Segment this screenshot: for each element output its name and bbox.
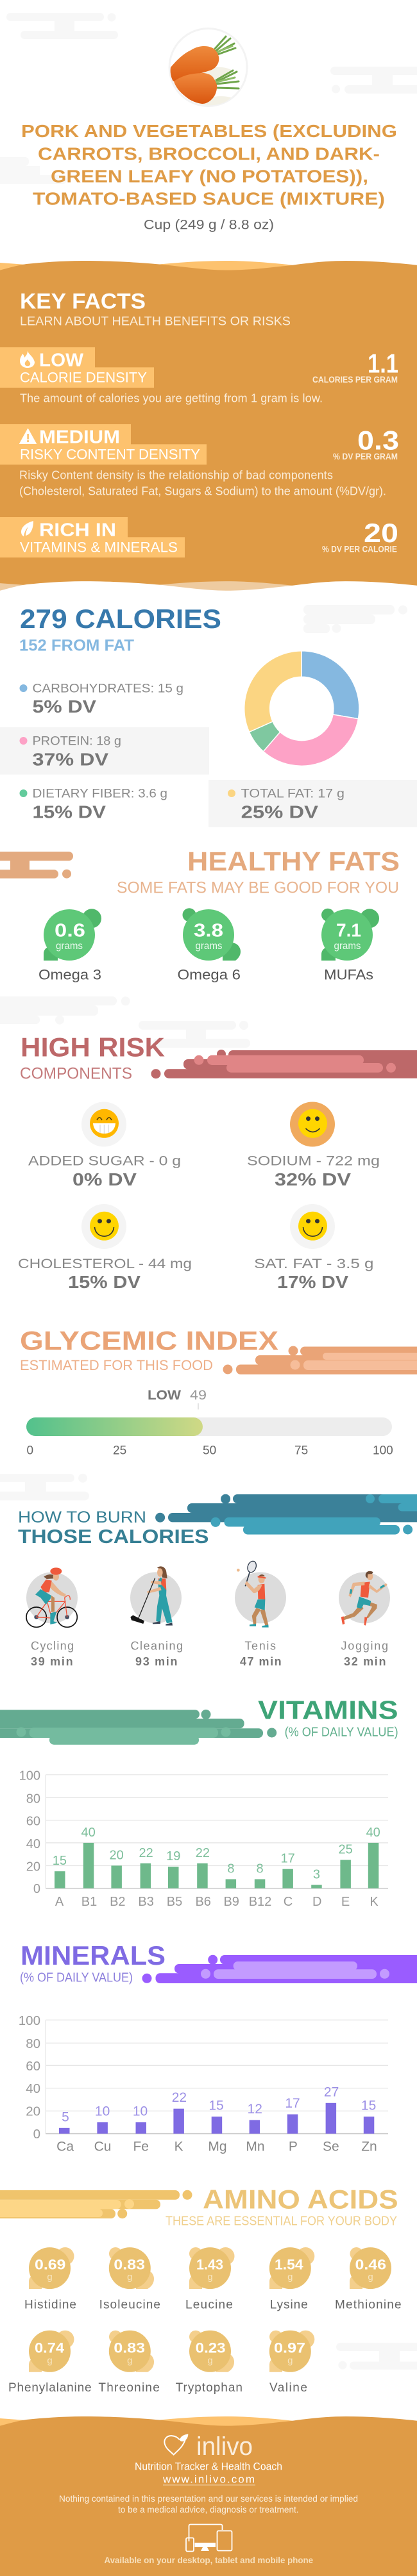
item: saturated fat: SAT. FAT - 3.5 g <box>254 1257 373 1271</box>
brand name: inlivo <box>196 2432 253 2461</box>
activity: tennis: Tenis <box>244 1639 276 1652</box>
disclaimer <box>59 2493 358 2514</box>
high risk cloud <box>151 1050 417 1078</box>
item: saturated fat: 17% DV <box>277 1272 348 1292</box>
amino: lysine: g <box>287 2272 293 2283</box>
panel: minerals <box>19 1940 417 2154</box>
burn heading <box>18 1508 209 1548</box>
fat: mufas: MUFAs <box>324 966 373 982</box>
amino: phenylalanine <box>8 2331 92 2395</box>
glycemic cloud <box>223 1346 417 1375</box>
burn heading: HOW TO BURN <box>18 1508 146 1526</box>
fat: omega 3: Omega 3 <box>38 966 101 982</box>
amino: methionine: g <box>368 2272 373 2283</box>
bar chart: minerals: P <box>289 2140 298 2154</box>
legend: dietary fiber: DIETARY FIBER: 3.6 g <box>32 787 167 801</box>
fact: medium risky content: (Cholesterol, Saturated Fat, Sugars & Sodium) to the amount (%DV/gr). <box>19 484 386 497</box>
legend backgrounds <box>0 727 417 827</box>
bar chart: minerals: 0 <box>33 2127 40 2142</box>
disclaimer: Nothing contained in this presentation and our services is intended or implied <box>59 2493 358 2504</box>
background cloud top left <box>6 13 118 39</box>
activity: tennis: 47 min <box>240 1655 282 1668</box>
icon: flame <box>20 351 35 368</box>
fat: omega 3: grams <box>56 941 83 952</box>
fact: medium risky content <box>0 424 399 497</box>
vitamins cloud <box>0 1710 277 1745</box>
amino: leucine: 1.43 <box>196 2257 223 2273</box>
fat: omega 6: grams <box>195 941 223 952</box>
item: sodium: 32% DV <box>275 1169 351 1189</box>
amino: phenylalanine: 0.74 <box>35 2340 65 2356</box>
panel: footer <box>0 2416 417 2576</box>
item: added sugar: ADDED SUGAR - 0 g <box>28 1154 181 1169</box>
calories from fat: 152 FROM FAT <box>19 637 134 655</box>
panel: amino acids <box>0 2184 417 2395</box>
activity: cleaning <box>130 1566 183 1668</box>
background cloud <box>336 2343 417 2370</box>
background cloud left <box>0 996 130 1025</box>
bar chart: vitamins: 40 <box>366 1826 380 1840</box>
icon: grinning emoji <box>90 1109 119 1138</box>
activity: jogging: Jogging <box>341 1639 388 1652</box>
fat: mufas: grams <box>334 941 361 952</box>
legend: total fat: 25% DV <box>241 802 318 822</box>
bar chart: minerals: 20 <box>26 2104 40 2119</box>
amino: valine: g <box>287 2356 293 2366</box>
bar chart: vitamins: D <box>312 1895 321 1909</box>
glycemic gauge: 49 <box>190 1388 207 1403</box>
bar chart: vitamins: 15 <box>53 1854 67 1868</box>
bar chart: vitamins: 8 <box>227 1862 234 1876</box>
amino: tryptophan: g <box>207 2356 213 2366</box>
bar chart: minerals: 15 <box>361 2099 376 2113</box>
amino: methionine: Methionine <box>335 2298 402 2311</box>
bar chart: minerals: Zn <box>361 2140 377 2154</box>
serving size: Cup (249 g / 8.8 oz) <box>144 217 274 232</box>
panel: healthy fats <box>0 846 400 982</box>
amino: isoleucine: Isoleucine <box>99 2298 160 2311</box>
glycemic gauge <box>26 1388 393 1458</box>
availability note: Available on your desktop, tablet and mobile phone <box>104 2555 313 2565</box>
bottom wave <box>0 581 417 597</box>
amino: isoleucine <box>99 2247 160 2311</box>
background cloud <box>0 1474 89 1500</box>
glycemic gauge: 75 <box>294 1444 308 1458</box>
amino: tryptophan: 0.23 <box>196 2340 226 2356</box>
bar chart: vitamins: B9 <box>223 1895 239 1909</box>
bar chart: vitamins: B6 <box>195 1895 211 1909</box>
bar chart: vitamins: 80 <box>26 1792 40 1806</box>
glycemic gauge: 25 <box>113 1444 126 1458</box>
bar chart: vitamins: B1 <box>81 1895 97 1909</box>
item: added sugar: 0% DV <box>72 1169 137 1189</box>
fact: rich in vitamins: 20 <box>364 518 398 548</box>
bar chart: vitamins: 8 <box>256 1862 264 1876</box>
bar chart: minerals: K <box>174 2140 183 2154</box>
fact: medium risky content: Risky Content density is the relationship of bad components <box>19 468 333 481</box>
legend: protein <box>19 734 121 769</box>
legend: carbohydrates <box>19 682 183 716</box>
bar chart: minerals: 5 <box>62 2110 69 2124</box>
bar chart: minerals: 100 <box>19 2013 40 2028</box>
glycemic gauge: 50 <box>203 1444 216 1458</box>
background cloud top right <box>330 67 417 94</box>
amino cloud <box>0 2190 192 2218</box>
glycemic heading: GLYCEMIC INDEX <box>20 1325 278 1356</box>
amino: leucine: g <box>207 2272 213 2283</box>
amino: lysine: Lysine <box>270 2298 308 2311</box>
bar chart: vitamins: 40 <box>26 1837 40 1851</box>
disclaimer: to be a medical advice, diagnosis or treatment. <box>118 2504 299 2514</box>
icon: leaf <box>21 521 33 536</box>
legend: total fat <box>228 787 345 822</box>
calories heading: 279 CALORIES <box>20 604 221 634</box>
activity: jogging <box>339 1571 390 1668</box>
amino: histidine: 0.69 <box>35 2257 65 2273</box>
amino: phenylalanine: g <box>47 2356 53 2366</box>
amino: isoleucine: 0.83 <box>114 2257 145 2273</box>
bar chart: minerals: 10 <box>133 2104 148 2118</box>
title <box>21 121 397 208</box>
legend: total fat: TOTAL FAT: 17 g <box>241 787 345 801</box>
vitamins heading: VITAMINS <box>258 1696 398 1725</box>
fact: medium risky content: MEDIUM <box>39 427 120 448</box>
panel: key facts <box>0 261 417 597</box>
minerals heading: MINERALS <box>21 1940 166 1970</box>
background cloud right <box>139 1021 250 1048</box>
glycemic subheading: ESTIMATED FOR THIS FOOD <box>20 1357 213 1373</box>
activity: cleaning: 93 min <box>135 1655 177 1668</box>
amino: methionine <box>335 2247 402 2311</box>
fact: rich in vitamins <box>0 517 398 557</box>
icon: cyclist <box>26 1567 78 1627</box>
amino: histidine: g <box>47 2272 53 2283</box>
icon: smiling emoji <box>298 1212 327 1241</box>
minerals subheading: (% OF DAILY VALUE) <box>20 1971 133 1985</box>
icon: cleaner <box>130 1566 182 1626</box>
bar chart: minerals: 40 <box>26 2081 40 2096</box>
icon: smiling emoji <box>90 1212 119 1241</box>
item: cholesterol: 15% DV <box>68 1272 140 1292</box>
fat: mufas <box>321 909 379 982</box>
high risk subheading: COMPONENTS <box>20 1064 132 1082</box>
item: saturated fat <box>254 1204 373 1292</box>
amino: valine: Valine <box>269 2381 307 2395</box>
panel: vitamins <box>0 1696 398 1909</box>
bar chart: vitamins: 0 <box>33 1882 40 1896</box>
icon: carrots <box>169 28 247 106</box>
fact: low calorie density <box>0 347 398 404</box>
background cloud <box>303 605 407 633</box>
amino: threonine: 0.83 <box>114 2340 145 2356</box>
glycemic gauge: LOW <box>148 1388 181 1403</box>
bar chart: minerals: 27 <box>324 2085 339 2099</box>
bar chart: vitamins: E <box>341 1895 350 1909</box>
bar chart: vitamins: 25 <box>338 1843 353 1857</box>
bar chart: minerals: 15 <box>208 2099 224 2113</box>
burn heading: THOSE CALORIES <box>18 1525 209 1548</box>
bar chart: minerals: Cu <box>94 2140 111 2154</box>
amino: leucine: Leucine <box>185 2298 233 2311</box>
minerals cloud <box>142 1955 417 1983</box>
amino: valine <box>269 2331 314 2395</box>
vitamins subheading: (% OF DAILY VALUE) <box>285 1726 398 1740</box>
bar chart: minerals: Mn <box>246 2140 265 2154</box>
amino: methionine: 0.46 <box>355 2257 386 2273</box>
high risk heading: HIGH RISK <box>21 1032 165 1062</box>
fact: low calorie density: CALORIE DENSITY <box>20 370 147 386</box>
amino: lysine <box>269 2247 314 2311</box>
icon: runner <box>339 1571 390 1626</box>
bar chart: minerals: 22 <box>172 2090 187 2105</box>
key facts heading: KEY FACTS <box>20 290 146 314</box>
fact: medium risky content: 0.3 <box>357 425 399 456</box>
fat: omega 6: 3.8 <box>194 921 223 941</box>
legend: dietary fiber <box>19 787 167 822</box>
amino heading: AMINO ACIDS <box>203 2184 398 2214</box>
amino: histidine: Histidine <box>24 2298 76 2311</box>
footer wave <box>0 2416 417 2576</box>
top wave <box>0 261 417 591</box>
panel: calories <box>0 604 417 827</box>
glycemic gauge: 100 <box>373 1444 393 1458</box>
donut chart <box>244 651 359 766</box>
bar chart: vitamins: 17 <box>280 1852 295 1866</box>
bar chart: vitamins: 3 <box>313 1867 320 1881</box>
fat: mufas: 7.1 <box>336 921 361 941</box>
amino: tryptophan: Tryptophan <box>176 2381 243 2395</box>
legend: dietary fiber: 15% DV <box>32 802 106 822</box>
item: sodium <box>247 1102 380 1189</box>
bar chart: minerals: 12 <box>248 2102 262 2117</box>
fact: medium risky content: % DV PER GRAM <box>333 451 398 461</box>
activity: cycling: Cycling <box>31 1639 74 1652</box>
amino: isoleucine: g <box>127 2272 132 2283</box>
bar chart: minerals: Se <box>323 2140 339 2154</box>
bar chart: vitamins: 100 <box>19 1769 40 1783</box>
amino: threonine: g <box>127 2356 132 2366</box>
item: cholesterol <box>18 1204 192 1292</box>
bar chart: vitamins: B5 <box>167 1895 182 1909</box>
bar chart: minerals: Mg <box>208 2140 227 2154</box>
amino: valine: 0.97 <box>274 2340 305 2356</box>
fact: low calorie density: LOW <box>39 351 84 371</box>
bar chart: vitamins: 20 <box>109 1848 124 1862</box>
panel: high risk <box>0 996 417 1292</box>
fact: low calorie density: 1.1 <box>368 349 398 379</box>
fat: omega 6 <box>177 908 241 982</box>
bar chart: vitamins: B2 <box>110 1895 126 1909</box>
bar chart: minerals: 10 <box>95 2104 110 2118</box>
healthy fats heading: HEALTHY FATS <box>187 846 400 876</box>
legend: carbohydrates: 5% DV <box>32 697 96 716</box>
bar chart: vitamins: 20 <box>26 1860 40 1874</box>
website: www.inlivo.com <box>162 2473 255 2485</box>
tagline: Nutrition Tracker & Health Coach <box>135 2461 282 2473</box>
item: cholesterol: CHOLESTEROL - 44 mg <box>18 1257 192 1271</box>
key facts heading: LEARN ABOUT HEALTH BENEFITS OR RISKS <box>20 314 291 328</box>
fact: rich in vitamins: VITAMINS & MINERALS <box>20 540 178 556</box>
bar chart: vitamins: A <box>55 1895 64 1909</box>
fact: medium risky content: RISKY CONTENT DENSITY <box>20 447 200 463</box>
bar chart: vitamins: K <box>370 1895 379 1909</box>
bar chart: minerals <box>19 2013 388 2154</box>
healthy fats subheading: SOME FATS MAY BE GOOD FOR YOU <box>117 879 399 897</box>
bar chart: vitamins: 60 <box>26 1815 40 1829</box>
fact: low calorie density: The amount of calories you are getting from 1 gram is low. <box>20 392 323 404</box>
activity: cycling <box>26 1567 78 1668</box>
fat: omega 3 <box>38 909 101 982</box>
icon: tennis player <box>235 1560 286 1628</box>
bar chart: vitamins: 22 <box>139 1846 153 1860</box>
activity: tennis <box>235 1560 286 1668</box>
amino subheading: THESE ARE ESSENTIAL FOR YOUR BODY <box>166 2214 397 2228</box>
bar chart: vitamins: B12 <box>249 1895 271 1909</box>
header cloud <box>0 852 73 879</box>
icon: devices <box>186 2525 232 2552</box>
title: CARROTS, BROCCOLI, AND DARK- <box>38 144 380 163</box>
glycemic gauge: 0 <box>27 1444 33 1458</box>
bar chart: vitamins: 40 <box>81 1826 96 1840</box>
bar chart: minerals: 17 <box>285 2096 300 2111</box>
panel: burn calories <box>0 1474 417 1668</box>
item: sodium: SODIUM - 722 mg <box>247 1154 380 1169</box>
bar chart: minerals: Fe <box>133 2140 149 2154</box>
legend: protein: PROTEIN: 18 g <box>32 734 121 748</box>
title: PORK AND VEGETABLES (EXCLUDING <box>21 121 397 141</box>
icon: inlivo heart logo <box>164 2434 188 2455</box>
bar chart: vitamins: C <box>284 1895 293 1909</box>
legend: carbohydrates: CARBOHYDRATES: 15 g <box>32 682 183 696</box>
amino: threonine <box>98 2331 160 2395</box>
activity: jogging: 32 min <box>344 1655 386 1668</box>
fat: omega 3: 0.6 <box>55 921 85 941</box>
amino: tryptophan <box>176 2331 243 2395</box>
bar chart: minerals: Ca <box>56 2140 74 2154</box>
amino: lysine: 1.54 <box>275 2257 303 2273</box>
header panel <box>0 13 417 232</box>
icon: warning <box>19 429 36 443</box>
title: GREEN LEAFY (NO POTATOES)), <box>51 167 368 186</box>
activity: cleaning: Cleaning <box>131 1639 183 1652</box>
amino: histidine <box>24 2247 76 2311</box>
panel: glycemic index <box>20 1325 417 1458</box>
bar chart: minerals: 80 <box>26 2036 40 2051</box>
amino: leucine <box>185 2247 235 2311</box>
fact: low calorie density: CALORIES PER GRAM <box>312 374 398 384</box>
bar chart: vitamins: 19 <box>166 1849 180 1863</box>
bar chart: vitamins <box>19 1769 388 1909</box>
key facts heading <box>20 290 291 328</box>
amino: phenylalanine: Phenylalanine <box>8 2381 92 2395</box>
fact: rich in vitamins: RICH IN <box>39 520 116 541</box>
icon: smiling emoji <box>298 1109 327 1138</box>
title: TOMATO-BASED SAUCE (MIXTURE) <box>33 188 385 208</box>
amino: threonine: Threonine <box>98 2381 160 2395</box>
item: added sugar <box>28 1102 181 1189</box>
bar chart: vitamins: B3 <box>138 1895 154 1909</box>
fat: omega 6: Omega 6 <box>177 966 241 982</box>
legend: protein: 37% DV <box>32 749 108 769</box>
bar chart: vitamins: 22 <box>196 1846 210 1860</box>
background cloud by title <box>0 157 67 184</box>
bar chart: minerals: 60 <box>26 2059 40 2074</box>
activity: cycling: 39 min <box>31 1655 73 1668</box>
burn cloud <box>155 1494 417 1535</box>
fact: rich in vitamins: % DV PER CALORIE <box>322 544 397 554</box>
